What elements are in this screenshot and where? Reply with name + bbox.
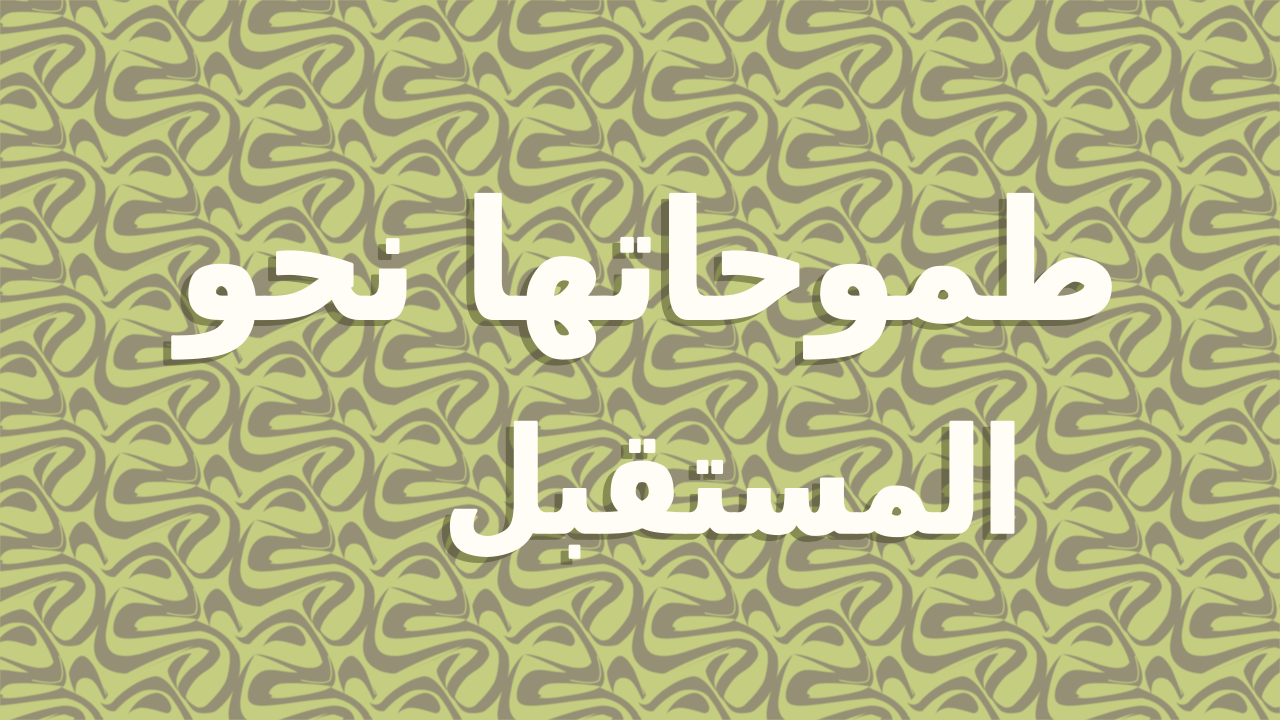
title [172,168,1119,567]
title line 2: المستقبل [443,399,1023,567]
title line 1: طموحاتها نحو [172,168,1119,358]
